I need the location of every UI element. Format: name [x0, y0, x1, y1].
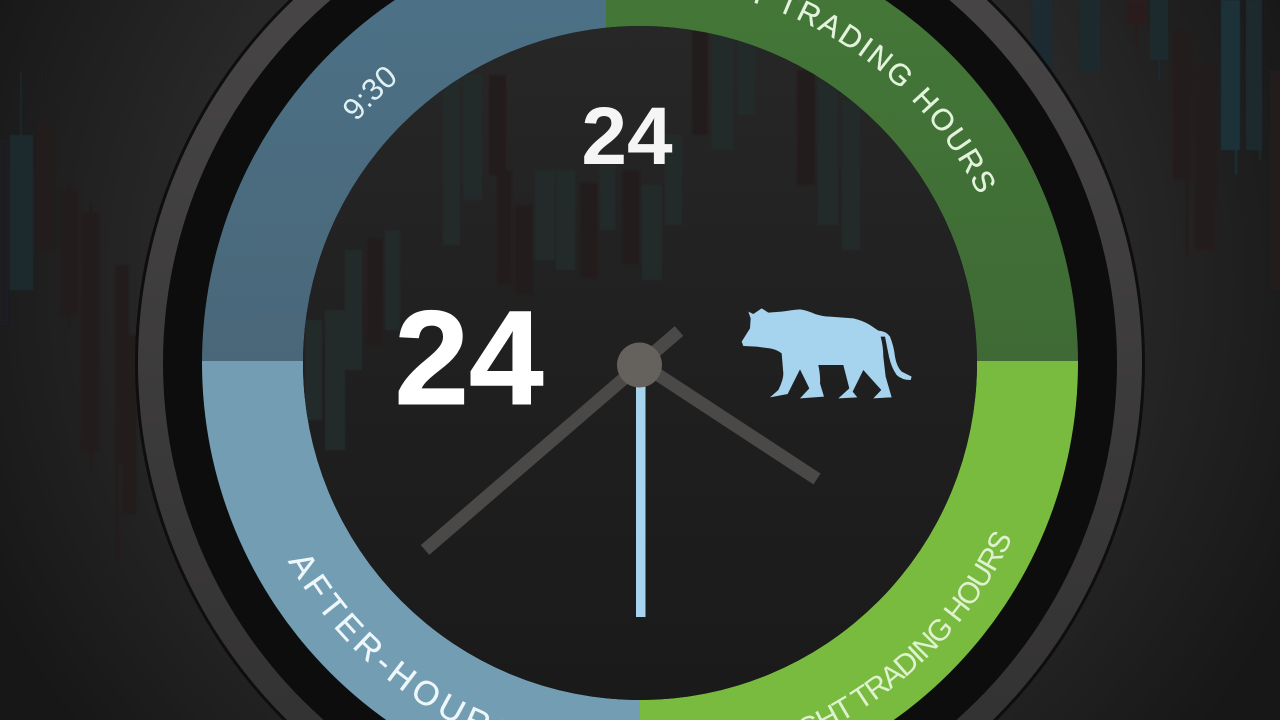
large 24 numeral: 24	[394, 284, 544, 433]
segment: after-hours, light blue	[202, 361, 640, 720]
clock hands	[425, 331, 817, 617]
hub	[617, 342, 662, 388]
hour hand	[640, 363, 817, 479]
candlestick chart: left background	[0, 72, 137, 560]
second hand	[636, 363, 646, 617]
clock bezel	[135, 0, 1145, 720]
segment: overnight, bright green	[640, 361, 1078, 720]
candlestick chart: right background	[1032, 0, 1280, 290]
segment: market trading hours, dark green	[606, 0, 1078, 361]
segmented ring	[202, 0, 1078, 720]
icon: bear	[742, 308, 912, 398]
clock face	[303, 26, 977, 700]
label: 9:30: 9:30	[344, 67, 396, 119]
minute hand	[425, 331, 679, 550]
segment: pre-market, dark blue	[202, 0, 606, 361]
candlestick chart: inside clock face	[305, 30, 860, 450]
small 24 numeral: 24	[581, 91, 673, 182]
